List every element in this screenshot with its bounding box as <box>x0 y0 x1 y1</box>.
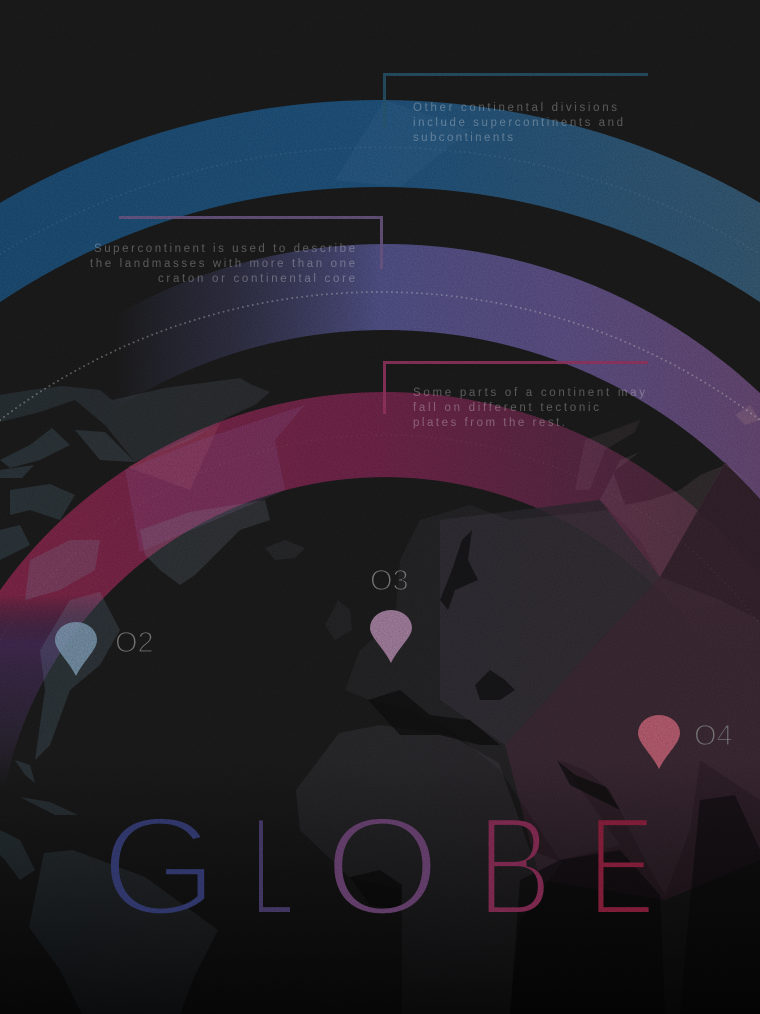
title <box>110 818 649 914</box>
text: other divisions: Other continental divisions <box>413 102 617 114</box>
leader line: red <box>383 361 648 414</box>
leader line: blue <box>383 73 648 128</box>
dotted arc: faint outer <box>0 147 760 254</box>
map: Iceland <box>265 540 305 560</box>
text: other divisions: include supercontinents and <box>413 117 623 129</box>
text: tectonic plates <box>413 387 645 429</box>
title: E <box>588 788 655 946</box>
world map <box>0 378 760 1014</box>
title: G <box>100 787 219 946</box>
map: UK and Ireland <box>325 600 352 640</box>
map: South America <box>29 850 218 1014</box>
map: North America <box>0 428 270 880</box>
text: other divisions <box>413 102 623 144</box>
arc band: purple <box>0 244 760 830</box>
map: Pacific islands <box>575 420 640 490</box>
callout: other divisions <box>383 73 648 144</box>
map: Africa <box>296 725 562 1014</box>
arc band: red <box>0 392 698 636</box>
bottom shadow <box>0 760 760 1014</box>
text: tectonic plates: fall on different tectonic <box>413 402 599 414</box>
translucent facet shapes <box>125 100 760 900</box>
leader line: purple <box>119 216 383 269</box>
title: O <box>324 787 441 945</box>
location numbers <box>115 565 733 752</box>
text: other divisions: subcontinents <box>413 132 513 144</box>
title: L <box>251 787 294 946</box>
location numbers: O2 <box>115 627 154 659</box>
text: supercontinent: Supercontinent is used to describe <box>94 243 355 255</box>
callout: supercontinent <box>90 216 383 285</box>
text: supercontinent: the landmasses with more than one <box>90 258 355 270</box>
pin: 03 <box>370 610 412 663</box>
text: supercontinent: craton or continental core <box>158 273 355 285</box>
pin: 02 <box>55 622 97 676</box>
dotted arc: faint inner <box>0 435 760 639</box>
location numbers: O4 <box>694 720 733 752</box>
arc band: blue <box>0 100 760 872</box>
map: Eurasia <box>345 505 760 895</box>
text: tectonic plates: Some parts of a continent may <box>413 387 645 399</box>
pin: 04 <box>638 715 680 769</box>
arc band: red fading to purple on the left <box>0 604 92 771</box>
callout: tectonic plates <box>383 361 648 429</box>
map: arctic and Greenland <box>0 378 760 577</box>
map: east edge island <box>735 405 760 425</box>
text: supercontinent <box>90 243 355 285</box>
text: tectonic plates: plates from the rest. <box>413 417 565 429</box>
dotted arc: main <box>0 292 760 420</box>
map: dark seas <box>350 530 760 1014</box>
title: B <box>477 788 552 946</box>
location numbers: O3 <box>370 565 409 597</box>
